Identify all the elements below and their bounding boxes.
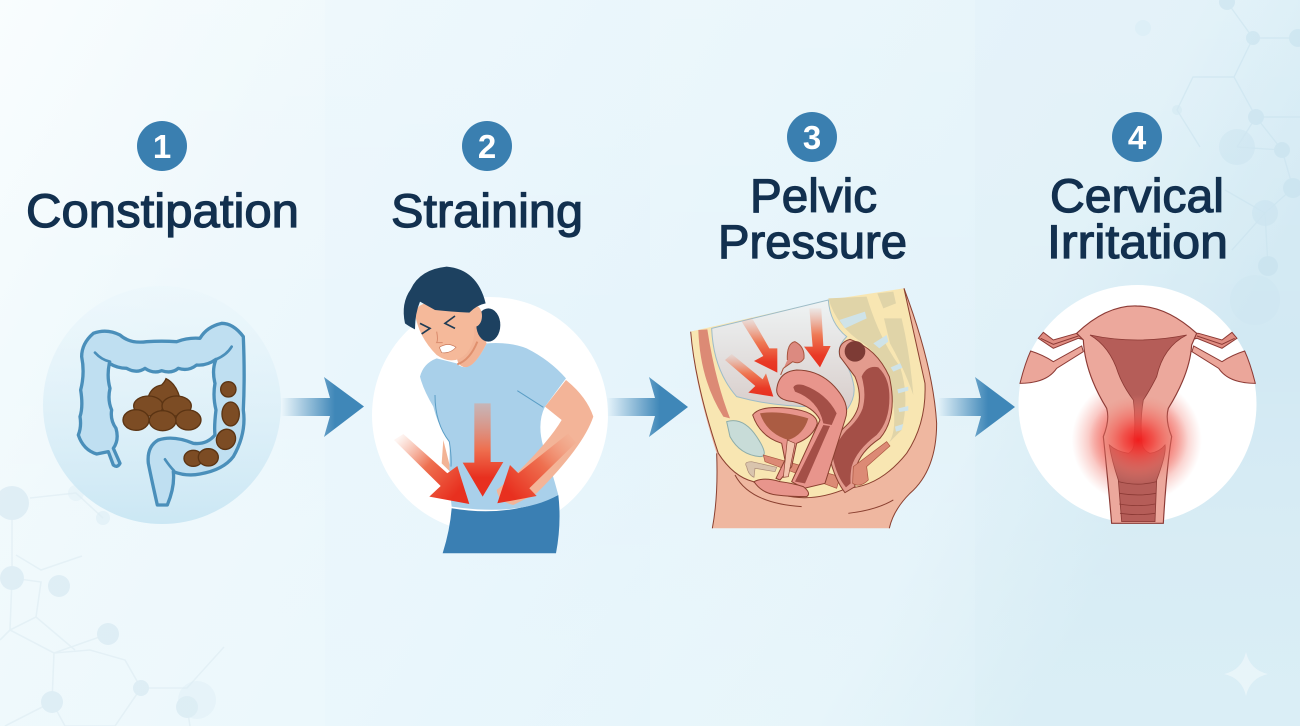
number badge 2: 2 [478,128,496,165]
icon: colon with stool [78,323,244,505]
molecule pattern: top right [1135,0,1300,325]
arrow 3 [938,377,1015,437]
panel: straining [372,121,608,553]
number badge 1: 1 [153,128,171,165]
panel: cervical irritation [1018,112,1256,523]
white circle [1018,285,1256,523]
heading: pelvic pressure [718,169,907,268]
heading: cervical irritation: Cervical [1050,169,1224,222]
number badge 4 [1112,112,1162,162]
illustration: pelvic cross-section [691,288,937,528]
illustration: uterus with red inflammation [1020,306,1255,523]
number badge 1 [137,121,187,171]
icon: sparkle [1224,652,1268,696]
number badge 3 [787,112,837,162]
molecule pattern: bottom left [0,485,224,726]
number badge 4: 4 [1128,119,1147,156]
heading: cervical irritation [1047,169,1228,268]
arrow 2 [607,377,688,437]
illustration: woman straining [394,267,593,553]
heading: pelvic pressure: Pressure [718,215,907,268]
heading: cervical irritation: Irritation [1047,215,1228,268]
panel: constipation [26,121,299,524]
number badge 3: 3 [803,119,821,156]
heading: straining: Straining [391,184,583,237]
white circle [372,297,608,533]
backing circle [43,286,281,524]
number badge 2 [462,121,512,171]
heading: pelvic pressure: Pelvic [750,169,877,222]
heading: constipation: Constipation [26,184,299,237]
panel: pelvic pressure [691,112,937,528]
arrow 1 [281,377,364,437]
